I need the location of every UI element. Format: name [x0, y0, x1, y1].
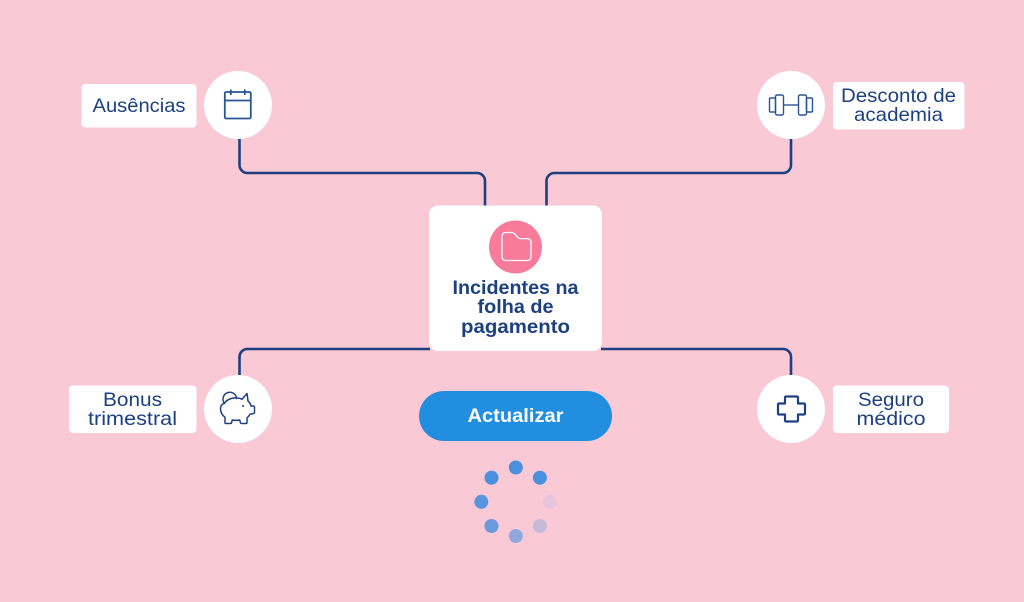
label: Bonus trimestral: Bonus [103, 389, 162, 411]
label: Bonus trimestral: trimestral [88, 408, 177, 430]
icon: dumbbell [757, 71, 825, 139]
connector: health insurance to center [601, 349, 791, 376]
heading: central title [452, 277, 579, 338]
label: Seguro médico [833, 386, 949, 433]
connector: absences to center [240, 139, 485, 206]
icon: calendar [204, 71, 272, 139]
loading spinner [474, 460, 557, 543]
connector: gym discount to center [546, 139, 791, 206]
connector: quarterly bonus to center [240, 349, 430, 376]
label: Seguro médico: médico [856, 408, 926, 430]
label: Bonus trimestral [69, 386, 196, 433]
icon: medical cross [757, 375, 825, 443]
heading: central title: folha de [478, 296, 554, 318]
panel: central card [429, 206, 602, 351]
label: Ausências [82, 84, 196, 128]
icon: piggy bank [204, 375, 272, 443]
label: Desconto de academia [833, 82, 964, 130]
button: Actualizar [419, 391, 612, 441]
heading: central title: Incidentes na [452, 277, 579, 299]
label: Desconto de academia: academia [854, 104, 943, 126]
heading: central title: pagamento [461, 316, 570, 338]
button: Actualizar: Actualizar [468, 405, 564, 427]
label: Desconto de academia: Desconto de [841, 85, 956, 107]
label: Seguro médico: Seguro [858, 389, 924, 411]
label: Ausências: Ausências [92, 95, 186, 117]
icon: folder [489, 220, 542, 274]
